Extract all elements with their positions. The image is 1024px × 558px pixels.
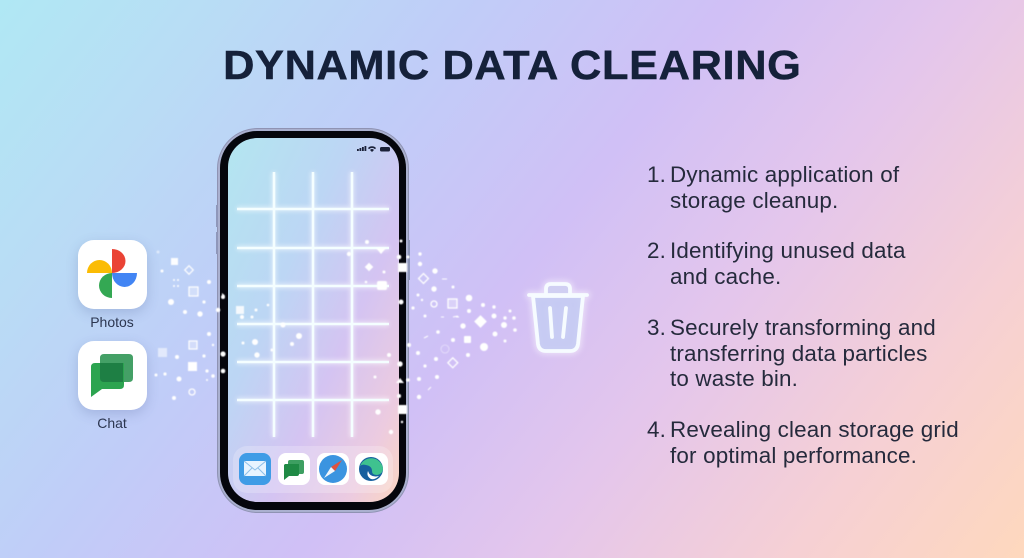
particle stream: apps to phone bbox=[154, 240, 411, 434]
icon: safari bbox=[317, 453, 349, 485]
step 3: 3. bbox=[647, 315, 666, 340]
step 1: 1. bbox=[647, 162, 666, 187]
icon: trash bin bbox=[529, 284, 587, 351]
icon: mail bbox=[239, 453, 271, 485]
step 4 bbox=[647, 417, 959, 468]
icon: edge bbox=[355, 453, 388, 485]
step 1 bbox=[647, 162, 900, 212]
label: Chat: Chat bbox=[97, 415, 127, 431]
step 2 bbox=[647, 238, 906, 288]
step 2: Identifying unused data bbox=[670, 238, 906, 263]
step 3: transferring data particles bbox=[670, 340, 928, 366]
step 1: storage cleanup. bbox=[670, 188, 838, 212]
phone body bbox=[216, 128, 410, 512]
step 3: Securely transforming and bbox=[670, 315, 936, 340]
dock bbox=[233, 446, 393, 493]
step 4: for optimal performance. bbox=[670, 442, 917, 468]
status bar icons bbox=[357, 146, 390, 152]
step 1: Dynamic application of bbox=[670, 162, 899, 187]
step 4: Revealing clean storage grid bbox=[670, 417, 959, 442]
label: Photos: Photos bbox=[90, 314, 134, 330]
step 3: to waste bin. bbox=[670, 366, 798, 391]
icon: Chat app bbox=[78, 341, 147, 410]
step 2: 2. bbox=[647, 238, 666, 263]
title: DYNAMIC DATA CLEARING bbox=[223, 42, 801, 88]
icon: Photos app bbox=[78, 240, 147, 309]
step 2: and cache. bbox=[670, 264, 781, 288]
icon: chat bbox=[278, 453, 310, 485]
particle stream: phone to bin bbox=[411, 252, 517, 399]
step 3 bbox=[647, 315, 936, 391]
step 4: 4. bbox=[647, 417, 666, 442]
glowing storage grid bbox=[237, 172, 389, 437]
